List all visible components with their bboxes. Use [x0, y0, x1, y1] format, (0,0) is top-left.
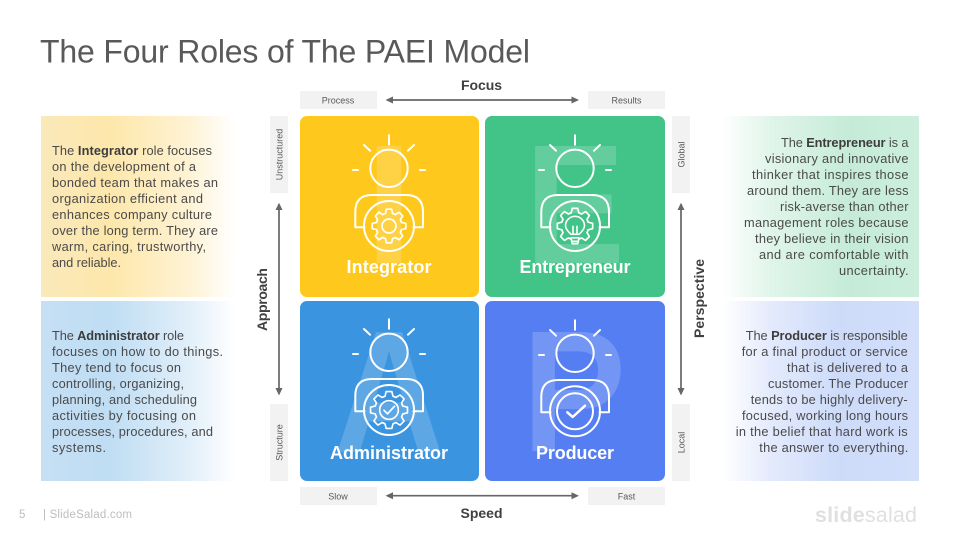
- card: Producer: [485, 294, 665, 488]
- panel: Producer description: tends to be highly delivery-: [751, 392, 908, 407]
- tag: Local: [672, 404, 690, 481]
- panel: Integrator description: The Integrator role focuses: [52, 143, 212, 158]
- panel: Producer description: focused, working long hours: [742, 408, 908, 423]
- arrow: vertical perspective: [678, 203, 684, 396]
- panel: Entrepreneur description: and are comfortable with: [759, 247, 908, 262]
- panel: Producer description: [722, 301, 919, 481]
- panel: Integrator description: [41, 116, 235, 297]
- panel: Integrator description: over the long term. They are: [52, 223, 218, 238]
- big letter E: E: [525, 109, 625, 299]
- panel: Administrator description: processes, procedures, and: [52, 424, 213, 439]
- axis: Focus: [300, 77, 665, 109]
- panel: Integrator description: and reliable.: [52, 255, 121, 270]
- panel: Integrator description: on the development of a: [52, 159, 197, 174]
- panel: Producer description: for a final product or service: [742, 344, 908, 359]
- icon: entrepreneur person with gear and bulb: [539, 135, 611, 251]
- panel: Integrator description: enhances company culture: [52, 207, 212, 222]
- heading: Focus: Focus: [461, 77, 502, 93]
- panel: Producer description: that is delivered to a: [787, 360, 909, 375]
- tag: Fast: Fast: [618, 492, 636, 502]
- heading: Approach: Approach: [254, 268, 270, 331]
- panel: Producer description: The Producer is responsible: [746, 328, 908, 343]
- panel: Entrepreneur description: The Entrepreneur is a: [781, 135, 909, 150]
- panel: Administrator description: systems.: [52, 440, 106, 455]
- axis: Approach: [254, 116, 288, 481]
- heading: Perspective: Perspective: [691, 259, 707, 338]
- tag: Unstructured: [270, 116, 288, 193]
- panel: Administrator description: controlling, organizing,: [52, 376, 184, 391]
- axis: Speed: [300, 487, 665, 521]
- big letter I: I: [365, 110, 413, 300]
- tag: Results: [588, 91, 665, 109]
- tag: Global: Global: [676, 141, 686, 168]
- heading: Speed: Speed: [460, 505, 502, 521]
- tag: Global: [672, 116, 690, 193]
- card: Entrepreneur: [485, 109, 665, 299]
- panel: Administrator description: activities by focusing on: [52, 408, 196, 423]
- footer: page number: 5: [19, 509, 25, 521]
- tag: Fast: [588, 487, 665, 505]
- panel: Entrepreneur description: management roles because: [744, 215, 908, 230]
- tag: Slow: Slow: [328, 492, 348, 502]
- icon: administrator person with gear and check: [353, 319, 425, 435]
- arrow: horizontal speed: [386, 492, 579, 499]
- title: The Four Roles of The PAEI Model: [40, 34, 530, 70]
- panel: Producer description: in the belief that hard work is: [736, 424, 908, 439]
- tag: Structure: [270, 404, 288, 481]
- tag: Slow: [300, 487, 377, 505]
- icon: integrator person with gear: [353, 135, 425, 251]
- label: Producer: Producer: [536, 443, 614, 463]
- label: Administrator: Administrator: [330, 443, 448, 463]
- panel: Entrepreneur description: they believe in their vision: [755, 231, 908, 246]
- card: Integrator: [300, 110, 479, 300]
- label: Integrator: Integrator: [346, 257, 432, 277]
- panel: Administrator description: The Administrator role: [52, 328, 184, 343]
- tag: Process: Process: [322, 96, 355, 106]
- axis: Perspective: [672, 116, 707, 481]
- panel: Integrator description: bonded team that makes an: [52, 175, 218, 190]
- panel: Producer description: the answer to everything.: [759, 440, 908, 455]
- tag: Local: Local: [676, 432, 686, 453]
- tag: Structure: Structure: [274, 424, 284, 461]
- tag: Process: [300, 91, 377, 109]
- big letter A: A: [334, 295, 444, 489]
- panel: Administrator description: They tend to focus on: [52, 360, 181, 375]
- panel: Administrator description: focuses on how to do things.: [52, 344, 223, 359]
- logo: slidesalad: slidesalad: [815, 503, 917, 527]
- arrow: vertical approach: [276, 203, 282, 396]
- tag: Unstructured: Unstructured: [274, 129, 284, 180]
- arrow: horizontal focus: [386, 96, 579, 104]
- panel: Entrepreneur description: thinker that inspires those: [752, 167, 908, 182]
- panel: Integrator description: warm, caring, trustworthy,: [51, 239, 206, 254]
- panel: Entrepreneur description: visionary and innovative: [765, 151, 908, 166]
- card: Administrator: [300, 295, 479, 489]
- panel: Entrepreneur description: [722, 116, 919, 297]
- tag: Results: Results: [611, 96, 642, 106]
- big letter P: P: [522, 294, 626, 488]
- label: Entrepreneur: Entrepreneur: [520, 257, 630, 277]
- panel: Entrepreneur description: risk-averse than other: [780, 199, 909, 214]
- panel: Entrepreneur description: around them. They are less: [747, 183, 908, 198]
- panel: Integrator description: organization efficient and: [52, 191, 203, 206]
- footer: site name: | SlideSalad.com: [43, 509, 132, 521]
- icon: producer person with check badge: [539, 320, 611, 436]
- panel: Producer description: customer. The Producer: [768, 376, 909, 391]
- panel: Administrator description: planning, and scheduling: [52, 392, 197, 407]
- panel: Entrepreneur description: uncertainty.: [839, 263, 908, 278]
- panel: Administrator description: [41, 301, 235, 481]
